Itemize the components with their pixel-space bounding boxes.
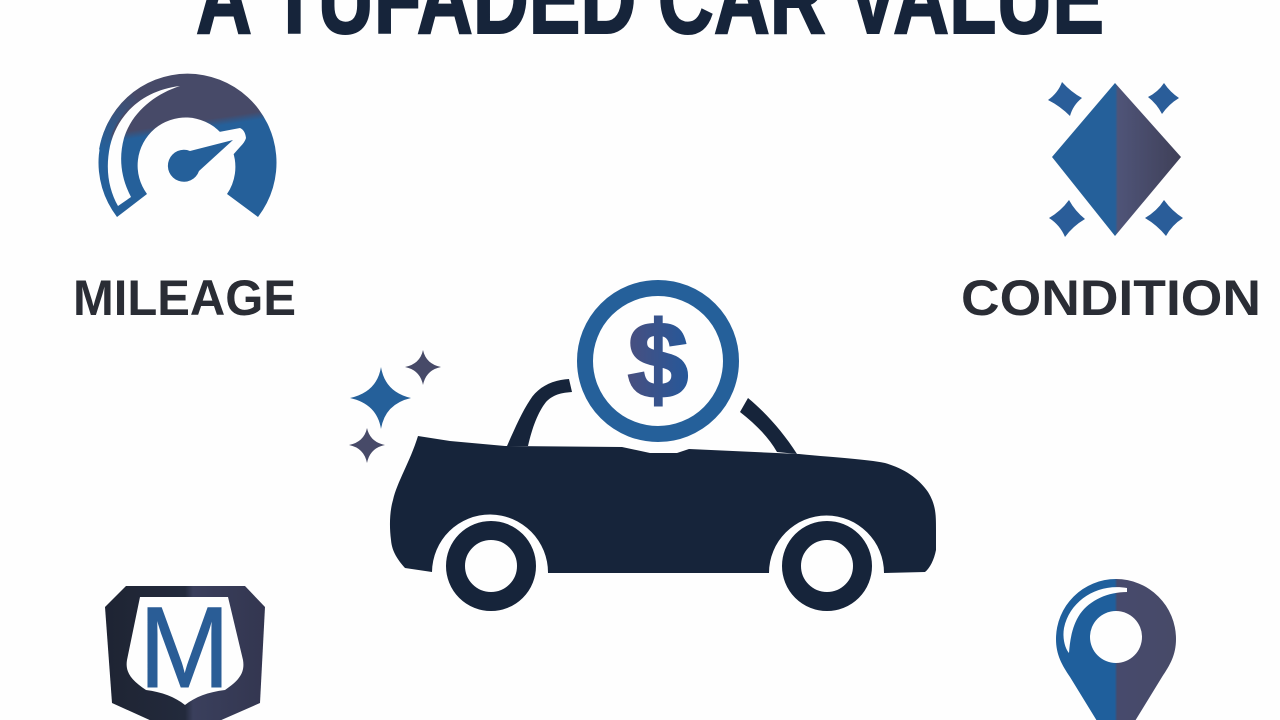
icon: condition diamond and sparkles bbox=[1048, 82, 1183, 237]
gauge needle bbox=[168, 140, 233, 182]
dollar coin bbox=[585, 288, 731, 434]
car windshield pillar right bbox=[740, 398, 797, 454]
label: mileage: MILEAGE bbox=[73, 270, 296, 326]
dollar coin: $ bbox=[628, 299, 688, 420]
sparkles bbox=[349, 350, 441, 463]
label: condition: CONDITION bbox=[961, 270, 1261, 326]
car body bbox=[390, 436, 936, 573]
right wheel bbox=[792, 530, 862, 602]
icon: make badge shield bbox=[105, 584, 265, 720]
icon: make badge shield: M bbox=[139, 584, 230, 712]
car windshield pillar left bbox=[507, 379, 572, 446]
illustration: car with dollar coin bbox=[349, 288, 936, 602]
icon: location pin bbox=[1056, 579, 1176, 720]
left wheel bbox=[456, 530, 526, 602]
icon: mileage speedometer bbox=[98, 74, 277, 217]
